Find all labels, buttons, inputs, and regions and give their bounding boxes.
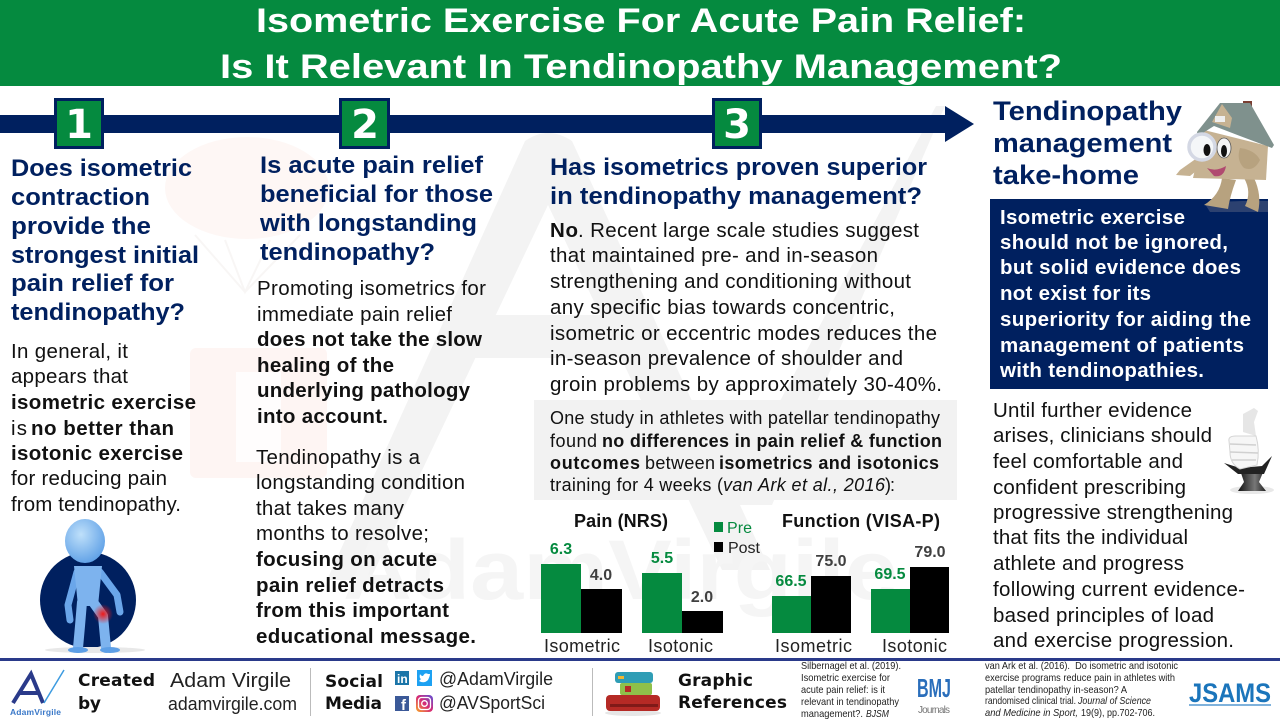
text block: answer 3: isometric or eccentric modes reduces the [550,322,937,345]
number badge 1 [56,100,102,148]
heading: question 3: Has isometrics proven superior [550,154,927,181]
heading: question 2 [259,152,493,266]
bar chart: function VISA-P: 79.0 [914,544,946,561]
text block: recommendation: confident prescribing [993,476,1186,499]
callout: study summary: between [645,453,715,473]
text block: answer 2: from this important [256,599,449,622]
callout: study summary: no differences in pain relief & function [602,431,942,451]
reference: van Ark: 19(9), pp.702-706. [1081,707,1155,719]
callout: study summary: training for 4 weeks ( [550,475,723,495]
bar chart: function VISA-P: Isometric [775,636,852,656]
text block: recommendation: that fits the individual [993,526,1188,549]
footer: social media: Media [325,694,382,714]
heading: question 1: provide the [11,213,151,240]
heading: take-home: take-home [993,160,1139,190]
callout: study summary: outcomes [550,453,640,473]
callout: take-home message: but solid evidence does [1000,256,1241,279]
footer: created by [78,670,297,714]
heading: take-home: management [993,128,1172,158]
reference: Silbernagel: management?. [801,708,863,720]
reference: van Ark: and Medicine in Sport, [985,707,1078,719]
heading: question 3 [550,154,927,210]
footer: logo: AdamVirgile [10,707,61,717]
text block: answer 3: groin problems by approximately 30-40%. [550,373,942,396]
icon: twitter [417,670,432,686]
heading: question 1: strongest initial [11,242,199,269]
text block: answer 3: strengthening and conditioning without [550,270,911,293]
bar chart: pain NRS: Isometric [544,636,620,656]
text block: answer 2: longstanding condition [256,471,465,494]
footer: created by: Created [78,671,155,691]
bar chart: function VISA-P: 75.0 [815,553,847,570]
heading: question 2: with longstanding [259,210,477,237]
text block: answer 2: healing of the [257,354,394,377]
callout: take-home message: not exist for its [1000,282,1151,305]
number badge 2: 2 [351,102,379,148]
heading: question 1: contraction [11,184,150,211]
panel: question 2 [256,152,493,648]
text block: answer 2 [256,277,486,648]
icon: figure with knee pain [40,519,145,653]
text block: answer 2: months to resolve; [256,522,429,545]
bar chart: pain NRS: 4.0 [590,567,612,584]
icon: facebook: f [401,697,407,714]
footer: graphic references heading [678,671,787,713]
text block: answer 1: no better than [31,417,174,440]
text block: answer 3: that maintained pre- and in-season [550,244,878,267]
footer: graphic references heading: References [678,693,787,713]
text block: recommendation: athlete and progress [993,552,1184,575]
text block: recommendation: progressive strengthening [993,501,1233,524]
callout: study summary: One study in athletes with patellar tendinopathy [550,408,940,428]
text block: answer 2: focusing on acute [256,548,437,571]
footer: created by: by [78,694,101,714]
icon: facebook [395,696,409,714]
text block: answer 1: is [11,417,27,440]
callout: take-home message: Isometric exercise [1000,206,1185,229]
text block: answer 3: any specific bias towards concentric, [550,296,895,319]
bar chart: pain NRS [541,511,723,656]
reference: van Ark: patellar tendinopathy in-season? A [985,684,1127,696]
text block: answer 1: appears that [11,365,128,388]
callout: study summary: isometrics and isotonics [719,453,939,473]
text block: recommendation: arises, clinicians should [993,424,1212,447]
text block: answer 2: Promoting isometrics for [257,277,486,300]
bar chart: function VISA-P: 69.5 [874,566,906,583]
text block: recommendation: based principles of load [993,604,1214,627]
reference: Silbernagel: Silbernagel et al. (2019). [801,660,901,672]
bar chart: pain NRS: 5.5 [651,550,673,567]
title banner: Isometric Exercise For Acute Pain Relief: [256,2,1026,40]
text block: answer 2: educational message. [256,625,476,648]
heading: question 2: beneficial for those [260,181,493,208]
text block: answer 1: isometric exercise [11,391,196,414]
bar chart: function VISA-P [772,511,949,656]
text block: answer 3 [550,219,942,396]
footer: social media: Social [325,672,383,692]
bar chart: pain NRS: 6.3 [550,541,572,558]
footer: social media: @AVSportSci [439,693,545,713]
text block: answer 1 [11,340,196,516]
reference: Silbernagel: BJSM [866,708,889,720]
text block: recommendation: and exercise progression. [993,629,1234,652]
reference: Silbernagel [801,660,901,720]
icon: linkedin: in [397,672,408,686]
panel: question 3 [534,154,957,656]
text block: answer 3: . Recent large scale studies suggest [578,219,919,242]
text block: answer 2: immediate pain relief [257,303,452,326]
timeline arrow [0,106,974,142]
text block: answer 1: for reducing pain [11,467,167,490]
text block: answer 2: does not take the slow [257,328,482,351]
callout: take-home message [990,199,1268,389]
heading: take-home [993,96,1182,190]
reference: Silbernagel: relevant in tendinopathy [801,696,900,708]
callout: take-home message: with tendinopathies. [999,359,1204,382]
callout: study summary: found [550,431,597,451]
title banner: Is It Relevant In Tendinopathy Management? [220,48,1062,86]
reference: van Ark [985,660,1178,719]
footer: logo [10,670,64,717]
heading: question 1: tendinopathy? [11,299,185,326]
number badge 3 [714,100,760,148]
reference: Silbernagel: acute pain relief: is it [801,684,885,696]
callout: take-home message: superiority for aiding the [1000,308,1251,331]
callout: study summary [534,400,957,500]
text block: answer 1: isotonic exercise [11,442,183,465]
text block: answer 3: in-season prevalence of shoulder and [550,347,903,370]
number badge 2 [340,100,388,148]
icon: house with magnifying glass [1176,101,1274,212]
text block: answer 2: pain relief detracts [256,574,444,597]
callout: take-home message: should not be ignored, [1000,231,1228,254]
reference: van Ark: randomised clinical trial. [985,695,1076,707]
text block: answer 2: that takes many [256,497,405,520]
title banner [0,0,1280,86]
bar chart: pain NRS: Isotonic [648,636,713,656]
reference: van Ark: Journal of Science [1077,695,1151,707]
heading: take-home: Tendinopathy [993,96,1182,126]
number badge 1: 1 [65,102,93,148]
reference: van Ark: van Ark et al. (2016). Do isometric and isotonic [985,660,1178,672]
heading: question 1: pain relief for [11,270,174,297]
reference: Silbernagel: Isometric exercise for [801,672,890,684]
text block: answer 1: In general, it [11,340,128,363]
chart legend: Pre [727,520,752,537]
footer: social media [325,669,553,714]
logo: BMJ Journals [917,673,951,716]
background watermark: AdamVirgile [343,523,898,617]
reference: van Ark: exercise programs reduce pain in athletes with [985,672,1175,684]
text block: answer 2: underlying pathology [257,379,471,402]
footer: graphic references heading: Graphic [678,671,753,691]
text block: recommendation: Until further evidence [993,399,1192,422]
background watermark [165,106,945,617]
heading: question 1 [11,155,199,326]
bar chart: pain NRS: 2.0 [691,589,713,606]
heading: question 1: Does isometric [11,155,192,182]
text block: recommendation: feel comfortable and [993,450,1183,473]
bar chart: function VISA-P: 66.5 [775,573,807,590]
footer divider [0,658,1280,661]
chart legend: Post [728,540,761,557]
text block: answer 3: No [550,219,578,242]
text block: recommendation [993,399,1245,652]
footer: created by: adamvirgile.com [168,694,297,714]
number badge 3: 3 [723,102,751,148]
text block: answer 2: Tendinopathy is a [256,446,421,469]
callout: take-home message: management of patients [1000,334,1244,357]
bar chart: function VISA-P: Function (VISA-P) [782,511,940,531]
footer: social media: @AdamVirgile [439,669,553,689]
logo: BMJ Journals: BMJ [917,673,951,703]
icon: thumbs up [1224,408,1274,494]
bar chart: pain NRS: Pain (NRS) [574,511,668,531]
logo: BMJ Journals: Journals [918,705,950,716]
icon: stack of books [605,672,661,716]
footer: created by: Adam Virgile [170,670,291,692]
heading: question 3: in tendinopathy management? [550,183,922,210]
panel: question 1 [11,155,199,653]
logo: JSAMS: JSAMS [1189,678,1271,708]
bar chart: function VISA-P: Isotonic [882,636,947,656]
panel: take-home [990,96,1274,652]
text block: recommendation: following current evidence- [993,578,1245,601]
chart legend [714,520,761,557]
text block: answer 1: from tendinopathy. [11,493,181,516]
callout: study summary: ): [885,475,895,495]
heading: question 2: Is acute pain relief [260,152,484,179]
text block: answer 2: into account. [257,405,388,428]
icon: instagram [416,695,433,712]
callout: study summary: van Ark et al., 2016 [723,475,886,495]
heading: question 2: tendinopathy? [260,239,435,266]
